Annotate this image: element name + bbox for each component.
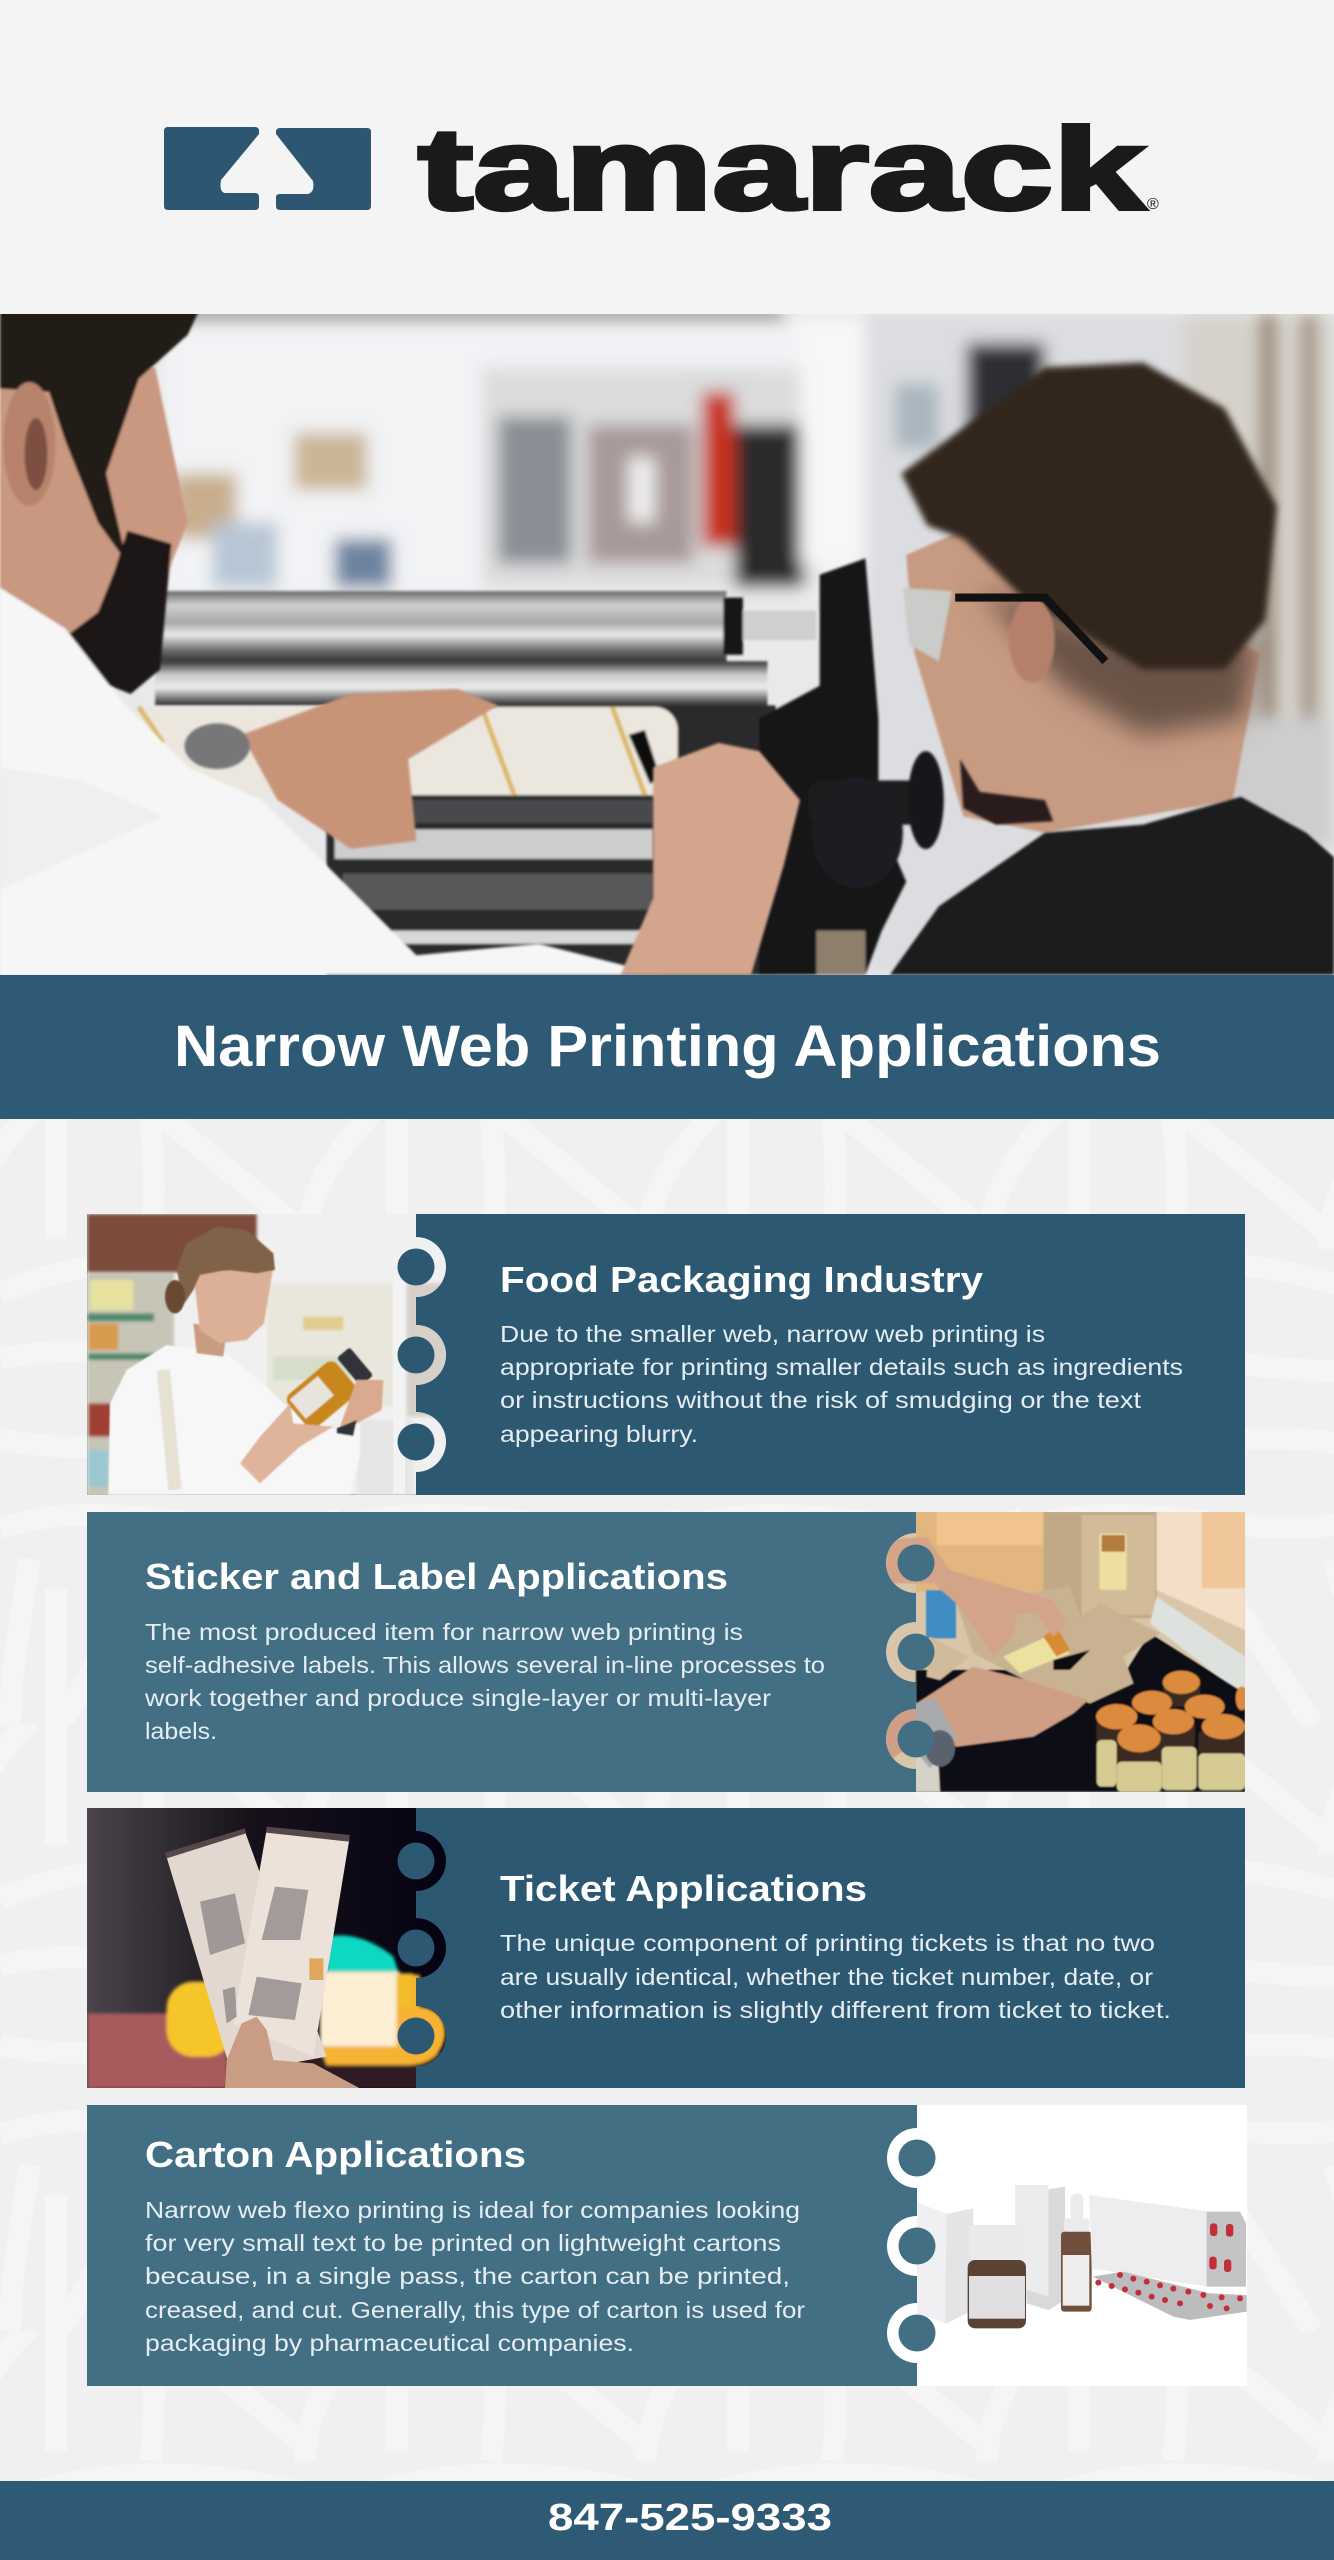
left technician bbox=[0, 310, 800, 975]
body text: or instructions without the risk of smudging or the text bbox=[500, 1387, 1142, 1413]
icon: tamarack mark bbox=[164, 127, 371, 210]
body text: appearing blurry. bbox=[500, 1421, 698, 1447]
body text: Due to the smaller web, narrow web printing is bbox=[500, 1321, 1045, 1347]
body text: labels. bbox=[145, 1718, 217, 1744]
body text: Narrow web flexo printing is ideal for companies looking bbox=[145, 2197, 800, 2223]
footer bar bbox=[0, 2481, 1334, 2560]
logo: tamarack bbox=[164, 104, 1159, 234]
body text: The most produced item for narrow web printing is bbox=[145, 1619, 743, 1645]
wordmark: tamarack bbox=[418, 104, 1146, 234]
registered mark: ® bbox=[1147, 196, 1159, 213]
panel: food packaging industry bbox=[87, 1214, 1245, 1497]
patterned background bbox=[0, 1119, 1334, 2482]
body text bbox=[144, 1619, 825, 1744]
heading: Carton Applications bbox=[145, 2134, 526, 2175]
body text: for very small text to be printed on lightweight cartons bbox=[145, 2230, 781, 2256]
markers bbox=[398, 1842, 434, 2054]
markers bbox=[898, 1544, 934, 1758]
blurred factory background bbox=[163, 310, 1334, 975]
panel: ticket applications bbox=[87, 1808, 1245, 2088]
heading: Ticket Applications bbox=[500, 1868, 867, 1909]
body text: packaging by pharmaceutical companies. bbox=[145, 2330, 634, 2356]
markers bbox=[898, 2140, 936, 2352]
title: Narrow Web Printing Applications bbox=[174, 1014, 1161, 1079]
body text: The unique component of printing tickets is that no two bbox=[500, 1930, 1155, 1956]
photo: pharmaceutical cartons and bottles bbox=[883, 2105, 1248, 2387]
body text: other information is slightly different from ticket to ticket. bbox=[500, 1997, 1171, 2023]
body text: because, in a single pass, the carton can be printed, bbox=[145, 2263, 790, 2289]
markers bbox=[398, 1248, 434, 1460]
hero photo: two technicians at a narrow web press bbox=[0, 310, 1334, 975]
photo: hands packing bottles bbox=[883, 1512, 1248, 1792]
body text: self-adhesive labels. This allows several in-line processes to bbox=[145, 1652, 825, 1678]
panel: sticker and label applications bbox=[87, 1512, 1248, 1792]
title banner bbox=[0, 975, 1334, 1119]
body text: creased, and cut. Generally, this type of carton is used for bbox=[145, 2297, 805, 2323]
panel: carton applications bbox=[87, 2105, 1248, 2387]
heading: Sticker and Label Applications bbox=[145, 1556, 728, 1597]
right technician bbox=[890, 362, 1334, 975]
press rollers bbox=[131, 558, 944, 975]
phone number: 847-525-9333 bbox=[548, 2497, 832, 2539]
body text bbox=[500, 1321, 1183, 1447]
photo: woman reading jar label bbox=[87, 1214, 454, 1497]
body text bbox=[500, 1930, 1171, 2023]
body text: appropriate for printing smaller details such as ingredients bbox=[500, 1354, 1183, 1380]
body text: are usually identical, whether the ticket number, date, or bbox=[500, 1964, 1153, 1990]
photo: hand holding tickets bbox=[87, 1808, 447, 2088]
body text: work together and produce single-layer or multi-layer bbox=[144, 1685, 771, 1711]
body text bbox=[145, 2197, 805, 2356]
heading: Food Packaging Industry bbox=[500, 1259, 983, 1300]
